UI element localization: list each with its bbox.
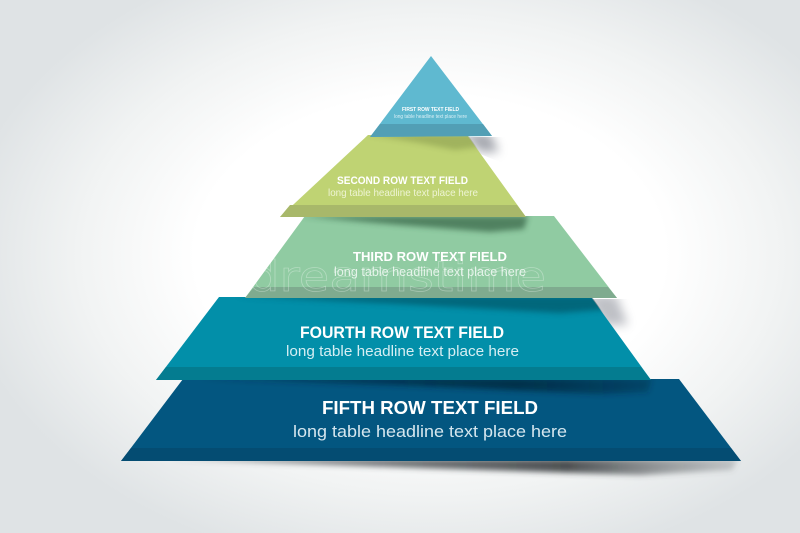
tier 5 subtitle: long table headline text place here [293, 422, 567, 441]
tier 5 title: FIFTH ROW TEXT FIELD [322, 398, 538, 418]
side shadow: first tier [462, 133, 499, 152]
tier 5 cast shadow [200, 378, 652, 394]
tier 3 subtitle: long table headline text place here [334, 265, 526, 279]
tier 3 front edge [245, 287, 617, 298]
ground shadow [170, 459, 738, 475]
tier 4 cast shadow [235, 296, 618, 313]
tier 3 cast shadow [300, 216, 528, 232]
tier 5 front edge [121, 448, 741, 461]
tier 4: fourth row [156, 296, 651, 380]
tier 3: third row [245, 216, 617, 301]
tier 5: fifth row [121, 378, 741, 461]
tier 1 front edge [370, 124, 492, 137]
tier 2 cast shadow [379, 136, 478, 152]
tier 2 subtitle: long table headline text place here [328, 187, 478, 199]
tier 2 title: SECOND ROW TEXT FIELD [337, 175, 468, 187]
side shadow: third tier [585, 295, 628, 325]
tier 2 front edge [280, 205, 526, 217]
tier 3 title: THIRD ROW TEXT FIELD [353, 249, 507, 264]
tier 1 subtitle: long table headline text place here [394, 114, 467, 120]
watermark: dreamstime [248, 252, 546, 301]
tier 4 subtitle: long table headline text place here [286, 343, 519, 360]
tier 4 title: FOURTH ROW TEXT FIELD [300, 323, 504, 342]
tier 4 front edge [156, 367, 651, 380]
tier 2: second row [280, 134, 526, 217]
tier 1: first row [370, 56, 492, 137]
tier 1 title: FIRST ROW TEXT FIELD [402, 107, 459, 113]
